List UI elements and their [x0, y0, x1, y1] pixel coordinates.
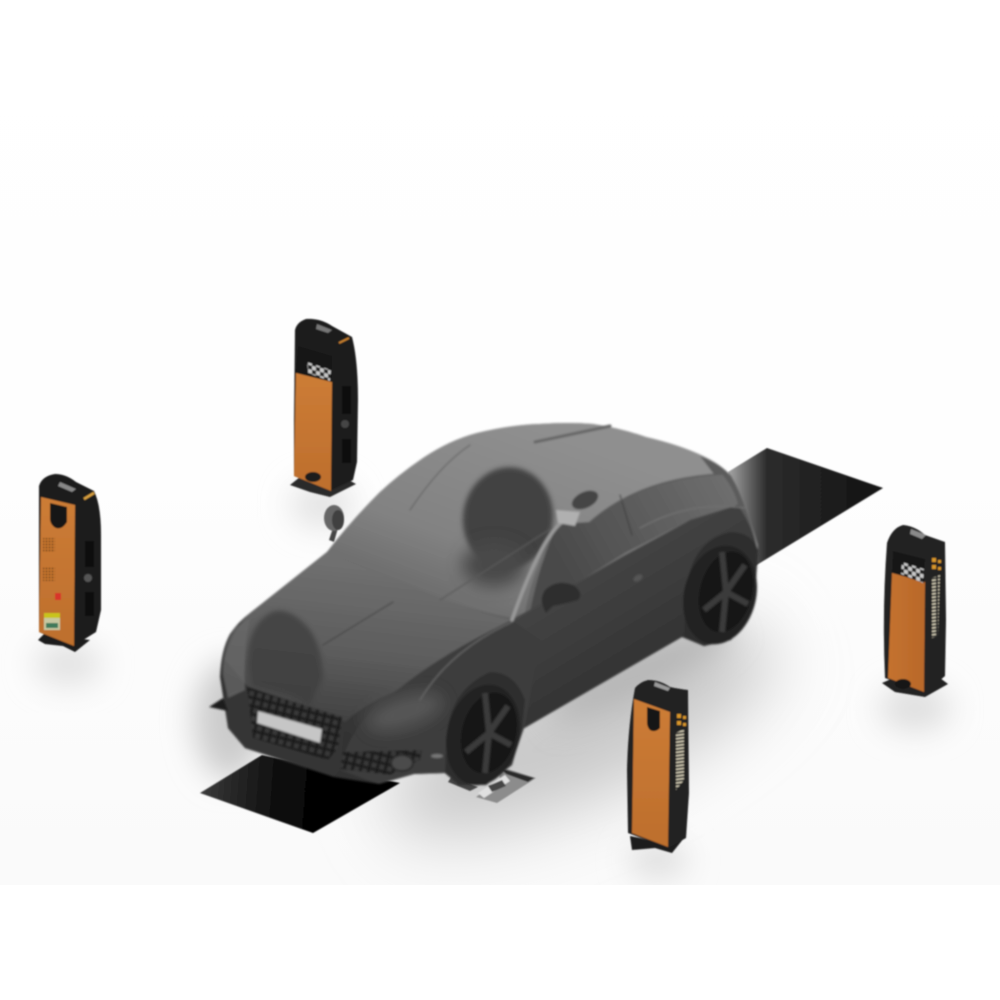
rear view mirror patch — [556, 510, 580, 526]
side glass — [530, 474, 738, 612]
status lights — [677, 714, 686, 726]
car body shell — [220, 423, 758, 785]
license plate — [257, 711, 322, 743]
headlight — [223, 618, 250, 698]
hood and pillar lines — [323, 426, 745, 700]
measuring LED strip — [932, 575, 940, 638]
door handle — [632, 573, 644, 583]
front wheel — [436, 677, 530, 793]
floor plate: rear — [728, 448, 883, 566]
front fender — [340, 620, 540, 785]
status lights — [932, 558, 941, 570]
seat lower shade — [462, 543, 526, 587]
front-seat headrest — [456, 461, 560, 575]
tower: right — [882, 525, 948, 697]
white band under floor — [0, 885, 1000, 1000]
glass canopy — [327, 423, 728, 618]
turntable under front wheel — [448, 766, 536, 803]
front bumper — [225, 686, 345, 777]
right door mirror — [542, 583, 580, 613]
engine bay shape under hood — [248, 611, 322, 705]
rear quarter — [685, 456, 757, 552]
measuring LED strip — [676, 729, 684, 790]
floor plate: front — [200, 755, 400, 833]
rear wheel arch — [684, 532, 758, 646]
floor shadows — [34, 481, 951, 879]
side bumper light — [431, 754, 443, 758]
grille — [247, 687, 342, 760]
tower: back-left — [290, 319, 358, 497]
rear wheel — [673, 538, 767, 652]
fender highlight — [362, 684, 448, 740]
hood — [225, 553, 512, 722]
front wheel arch — [445, 672, 525, 785]
door side panel — [420, 505, 757, 730]
interior mirror — [569, 487, 601, 513]
left bumper corner — [209, 698, 228, 711]
lower intake — [340, 750, 422, 775]
fog lamp — [391, 755, 413, 771]
car — [209, 423, 767, 793]
left mirror — [324, 505, 344, 542]
tower: front — [627, 680, 689, 853]
tower: left — [38, 474, 101, 652]
